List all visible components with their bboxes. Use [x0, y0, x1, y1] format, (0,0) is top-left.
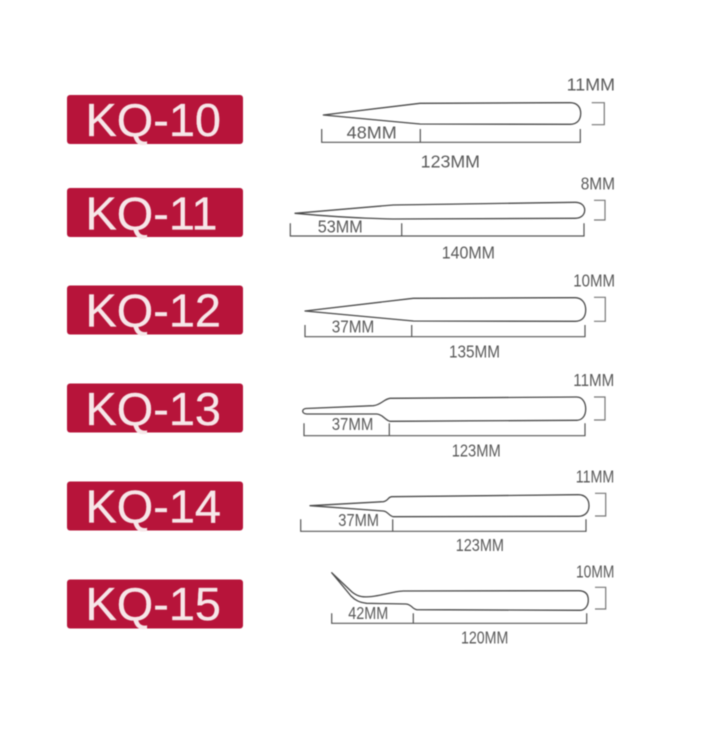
row: KQ-13 — [67, 370, 614, 461]
length dimension lines: KQ-11 — [290, 223, 584, 236]
tip length label: KQ-14: 37MM — [338, 510, 379, 530]
width bracket: KQ-11 — [594, 200, 605, 220]
tip length label: KQ-10: 48MM — [347, 122, 397, 142]
row: KQ-12 — [67, 271, 615, 362]
badge: KQ-10: KQ-10 — [86, 94, 221, 146]
row: KQ-15 — [67, 561, 614, 647]
width label: KQ-15: 10MM — [576, 561, 614, 581]
total length label: KQ-14: 123MM — [456, 535, 504, 555]
width label: KQ-14: 11MM — [576, 467, 614, 487]
length dimension lines: KQ-13 — [304, 423, 585, 436]
badge: KQ-15: KQ-15 — [86, 578, 221, 630]
length dimension lines: KQ-15 — [332, 613, 587, 623]
badge: KQ-12: KQ-12 — [86, 285, 221, 337]
width bracket: KQ-14 — [595, 493, 606, 516]
row: KQ-14 — [67, 467, 614, 555]
badge: KQ-13: KQ-13 — [86, 383, 221, 435]
width bracket: KQ-13 — [594, 397, 605, 420]
length dimension lines: KQ-14 — [301, 519, 586, 531]
tweezer outline: KQ-11 — [295, 202, 585, 219]
length dimension lines: KQ-12 — [305, 325, 585, 337]
width label: KQ-10: 11MM — [567, 75, 615, 95]
tip length label: KQ-15: 42MM — [348, 603, 388, 623]
tweezer outline: KQ-13 — [303, 397, 586, 421]
row: KQ-10 — [67, 75, 615, 172]
total length label: KQ-15: 120MM — [461, 627, 508, 647]
width label: KQ-13: 11MM — [573, 370, 614, 390]
width bracket: KQ-10 — [592, 103, 604, 125]
total length label: KQ-10: 123MM — [421, 152, 480, 172]
tweezer outline: KQ-12 — [305, 298, 586, 321]
tip length label: KQ-13: 37MM — [332, 414, 373, 434]
badge: KQ-14: KQ-14 — [86, 481, 221, 533]
tweezer outline: KQ-14 — [310, 495, 589, 517]
tip length label: KQ-11: 53MM — [318, 216, 363, 236]
row: KQ-11 — [67, 173, 615, 262]
tip length label: KQ-12: 37MM — [332, 317, 374, 337]
length dimension lines: KQ-10 — [322, 129, 580, 142]
width bracket: KQ-15 — [595, 587, 606, 609]
tweezer outline: KQ-10 — [323, 103, 581, 124]
total length label: KQ-11: 140MM — [442, 242, 495, 262]
tweezer outline: KQ-15 — [332, 573, 588, 610]
total length label: KQ-12: 135MM — [449, 342, 500, 362]
width bracket: KQ-12 — [594, 297, 605, 321]
width label: KQ-11: 8MM — [581, 173, 615, 193]
total length label: KQ-13: 123MM — [452, 441, 501, 461]
width label: KQ-12: 10MM — [573, 271, 615, 291]
badge: KQ-11: KQ-11 — [86, 188, 218, 240]
